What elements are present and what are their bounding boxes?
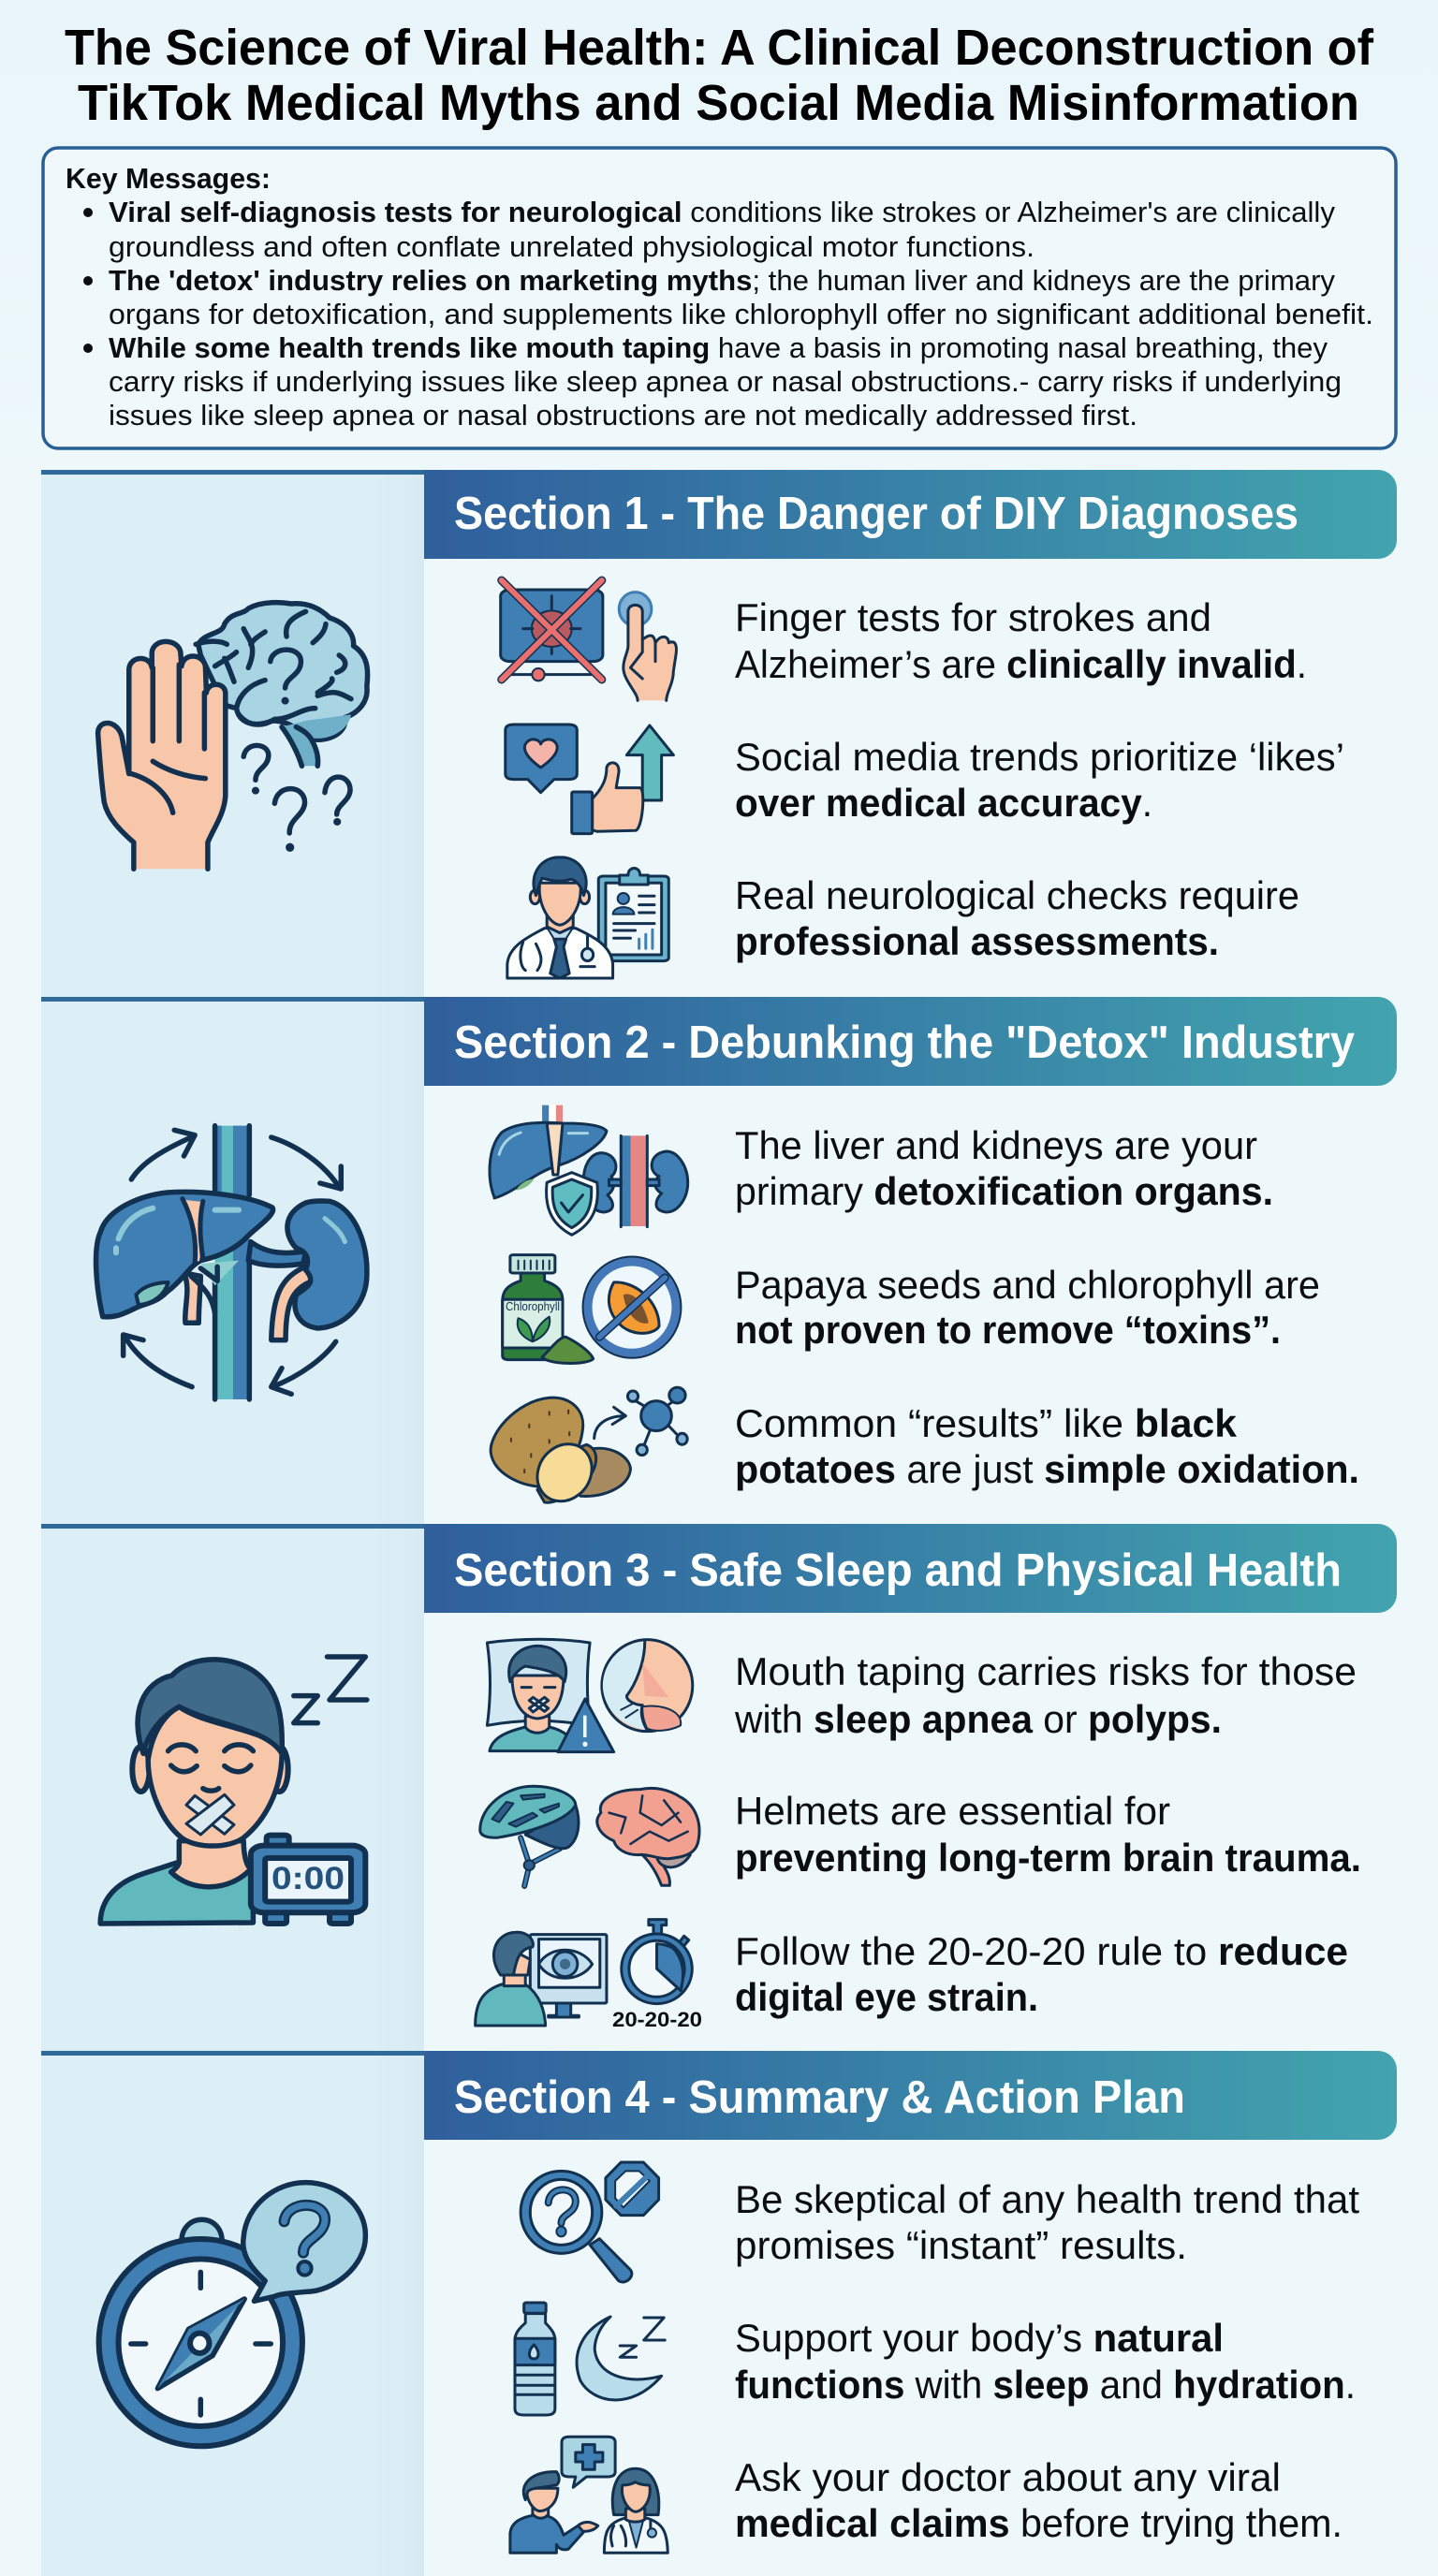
key message 3: issues like sleep apnea or nasal obstructions are not medically addressed first. [109,399,1137,432]
icon: doctor with clipboard [507,857,668,978]
key messages heading: Key Messages: [66,162,271,195]
text: section 3 points: preventing long-term brain trauma. [735,1836,1361,1880]
title [65,20,1374,131]
key message 1 [83,196,1335,263]
text: section 4 points: functions with sleep and hydration. [735,2363,1356,2407]
icon: sleeping person with taped mouth and clock: 0:00 [271,1861,345,1896]
key message 3: carry risks if underlying issues like sleep apnea or nasal obstructions.- carry risks if underlying [109,365,1342,398]
section 3 heading [424,1524,1397,1613]
icon: liver and kidneys detox cycle [96,1126,367,1399]
text: section 1 points: Social media trends prioritize ‘likes’ [735,735,1344,779]
text: section 3 points: Follow the 20-20-20 rule to reduce [735,1929,1348,1973]
icon: chlorophyll bottle and crossed-out papaya: Chlorophyll [506,1299,560,1313]
icon: person at screen, stopwatch and 20-20-20 label: 20-20-20 [612,2008,702,2031]
icon: taped sleeper, warning and nose [487,1639,693,1752]
text: section 2 points: not proven to remove “toxins”. [735,1308,1281,1352]
key message 3 [83,331,1342,432]
icon: water bottle and moon [515,2303,665,2415]
section 3 heading: Section 3 - Safe Sleep and Physical Health [454,1545,1342,1596]
text: section 2 points: primary detoxification organs. [735,1169,1273,1213]
icon: likes bubble, thumbs up and arrow [506,724,673,834]
text: section 4 points: Ask your doctor about any viral [735,2455,1281,2499]
text: section 2 points [735,1123,1359,1491]
text: section 1 points: over medical accuracy. [735,781,1152,825]
text: section 2 points: The liver and kidneys are your [735,1123,1257,1167]
key message 3: While some health trends like mouth taping have a basis in promoting nasal breathing, they [109,331,1328,364]
key message 1: Viral self-diagnosis tests for neurological conditions like strokes or Alzheimer's are clinically [109,196,1335,228]
text: section 4 points: medical claims before trying them. [735,2501,1343,2545]
text: section 3 points: Mouth taping carries risks for those [735,1649,1357,1693]
key message 2: organs for detoxification, and supplements like chlorophyll offer no significant additional benefit. [109,298,1373,330]
text: section 2 points: Papaya seeds and chlorophyll are [735,1263,1320,1307]
section 2 heading: Section 2 - Debunking the "Detox" Industry [454,1017,1355,1068]
text: section 1 points [735,595,1344,963]
icon: helmet and brain [480,1786,699,1886]
panel: section 1 [41,470,1397,978]
title: The Science of Viral Health: A Clinical Deconstruction of [65,20,1374,76]
section 2 heading [424,997,1397,1086]
text: section 1 points: professional assessments. [735,919,1219,963]
icon: liver, kidneys and shield [490,1105,688,1235]
panel: key messages [43,148,1396,448]
text: section 2 points: potatoes are just simple oxidation. [735,1447,1359,1491]
text: section 2 points: Common “results” like black [735,1401,1238,1445]
panel: section 3 [41,1524,1397,2031]
section 4 heading: Section 4 - Summary & Action Plan [454,2072,1185,2123]
text: section 1 points: Real neurological checks require [735,873,1299,917]
icon: person at screen, stopwatch and 20-20-20 label [476,1920,702,2031]
text: section 3 points: digital eye strain. [735,1975,1038,2019]
text: section 4 points: Be skeptical of any health trend that [735,2177,1359,2221]
text: section 3 points: Helmets are essential for [735,1789,1170,1833]
icon: crossed-out virus screen and pointing finger [501,580,676,700]
icon: sleeping person with taped mouth and clock [100,1657,367,1924]
text: section 3 points [734,1649,1361,2019]
text: section 4 points: promises “instant” results. [735,2223,1187,2267]
icon: patient asking doctor [510,2437,668,2553]
key message 1: groundless and often conflate unrelated physiological motor functions. [109,230,1034,263]
icon: magnifier and stop sign [521,2162,659,2282]
icon: oxidised potatoes and molecule [491,1387,687,1503]
key message 2: The 'detox' industry relies on marketing myths; the human liver and kidneys are the primary [109,264,1335,297]
icon: hand with brain and question marks [98,603,368,869]
text: section 3 points: with sleep apnea or polyps. [734,1697,1222,1741]
text: section 1 points: Alzheimer’s are clinically invalid. [735,642,1307,686]
icon: chlorophyll bottle and crossed-out papaya [503,1255,676,1363]
panel: section 4 [41,2051,1397,2553]
icon: compass with question bubble [99,2183,365,2446]
section 4 heading [424,2051,1397,2140]
section 1 heading: Section 1 - The Danger of DIY Diagnoses [454,489,1299,539]
text: section 1 points: Finger tests for strokes and [735,595,1211,639]
key message 2 [83,264,1373,330]
panel: section 2 [41,997,1397,1503]
text: section 4 points [735,2177,1359,2545]
section 1 heading [424,470,1397,559]
title: TikTok Medical Myths and Social Media Misinformation [78,75,1359,131]
text: section 4 points: Support your body’s natural [735,2316,1224,2360]
